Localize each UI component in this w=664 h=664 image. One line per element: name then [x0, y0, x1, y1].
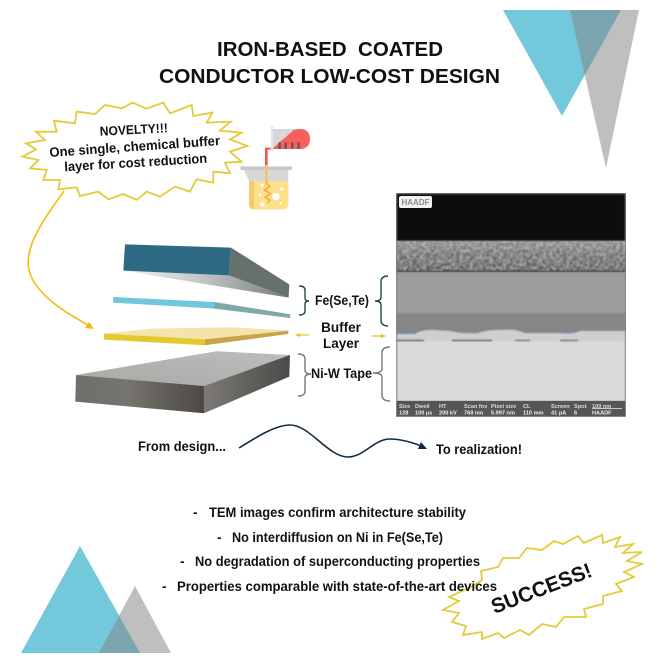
TEM data bar: 41 pA — [551, 410, 566, 416]
bullet list: results: - — [217, 530, 222, 545]
TEM data bar: 100 nm — [592, 404, 611, 410]
callout: success burst: SUCCESS! — [488, 559, 595, 619]
icon: pouring flask and beaker — [240, 126, 310, 209]
bullet list: results: Properties comparable with state-of-the-art devices — [177, 579, 497, 594]
label: to realization: To realization! — [436, 442, 522, 457]
layer: thin Fe(Se,Te) film — [113, 297, 290, 318]
TEM data bar: Screen — [551, 404, 570, 410]
TEM data bar: 768 nm — [464, 410, 483, 416]
bullet list: results: TEM images confirm architecture stability — [209, 505, 466, 520]
TEM data bar: HAADF — [592, 410, 612, 416]
layer: yellow buffer — [104, 327, 289, 345]
title: IRON-BASED COATED — [217, 38, 443, 61]
arrow: novelty to buffer layer — [28, 191, 94, 329]
layer: top Fe(Se,Te) block — [123, 244, 289, 298]
bullet list: results: - — [193, 505, 198, 520]
label: buffer layer — [321, 320, 362, 351]
label: buffer layer: Buffer — [321, 320, 362, 335]
bracket: Ni-W right — [373, 347, 390, 401]
arrow: buffer left — [295, 333, 309, 337]
TEM data bar: 5.997 nm — [491, 410, 515, 416]
TEM data bar: Scan fov — [464, 404, 488, 410]
bracket: Fe(Se,Te) left — [299, 286, 309, 315]
TEM data bar: Dwell — [415, 404, 430, 410]
decorative triangles: bottom left — [21, 546, 171, 653]
TEM HAADF tag — [399, 196, 432, 208]
callout: novelty burst — [23, 103, 247, 200]
TEM data bar: CL — [523, 404, 531, 410]
bullet list: results — [162, 505, 497, 594]
bracket: Fe(Se,Te) right — [375, 276, 388, 326]
arrow: buffer right — [372, 334, 386, 338]
bullet list: results: - — [180, 554, 184, 569]
TEM data bar — [397, 401, 625, 416]
TEM data bar: 110 mm — [523, 410, 544, 416]
TEM data bar: 100 µs — [415, 410, 432, 416]
label: from design: From design... — [138, 439, 226, 454]
TEM data bar: Size — [399, 404, 410, 410]
TEM data bar: 128 — [399, 410, 408, 416]
TEM data bar: HT — [439, 404, 447, 410]
title — [159, 38, 500, 88]
label: buffer layer: Layer — [323, 336, 360, 351]
callout: success burst — [443, 535, 642, 639]
bullet list: results: No interdiffusion on Ni in Fe(Se,Te) — [232, 530, 443, 545]
title: CONDUCTOR LOW-COST DESIGN — [159, 65, 500, 88]
bullet list: results: - — [162, 579, 166, 594]
TEM HAADF tag: HAADF — [402, 198, 430, 207]
bracket: Ni-W left — [298, 354, 311, 396]
callout: novelty burst: layer for cost reduction — [64, 151, 208, 174]
label: Ni-W Tape: Ni-W Tape — [311, 366, 372, 381]
bullet list: results: No degradation of superconducting properties — [195, 554, 480, 569]
TEM data bar: Spot — [574, 404, 587, 410]
callout: novelty burst: NOVELTY!!! — [99, 120, 168, 139]
TEM data bar: 200 kV — [439, 410, 457, 416]
TEM micrograph — [396, 193, 626, 417]
layer: Ni-W tape block — [75, 351, 290, 413]
label: Fe(Se,Te): Fe(Se,Te) — [315, 293, 369, 308]
callout: novelty burst: One single, chemical buffer — [49, 133, 221, 160]
layer stack diagram — [75, 244, 290, 413]
TEM data bar: 6 — [574, 410, 577, 416]
decorative triangles: top right — [503, 10, 639, 168]
arrow: wavy design to realization — [239, 425, 427, 457]
TEM data bar: Pixel size — [491, 404, 516, 410]
